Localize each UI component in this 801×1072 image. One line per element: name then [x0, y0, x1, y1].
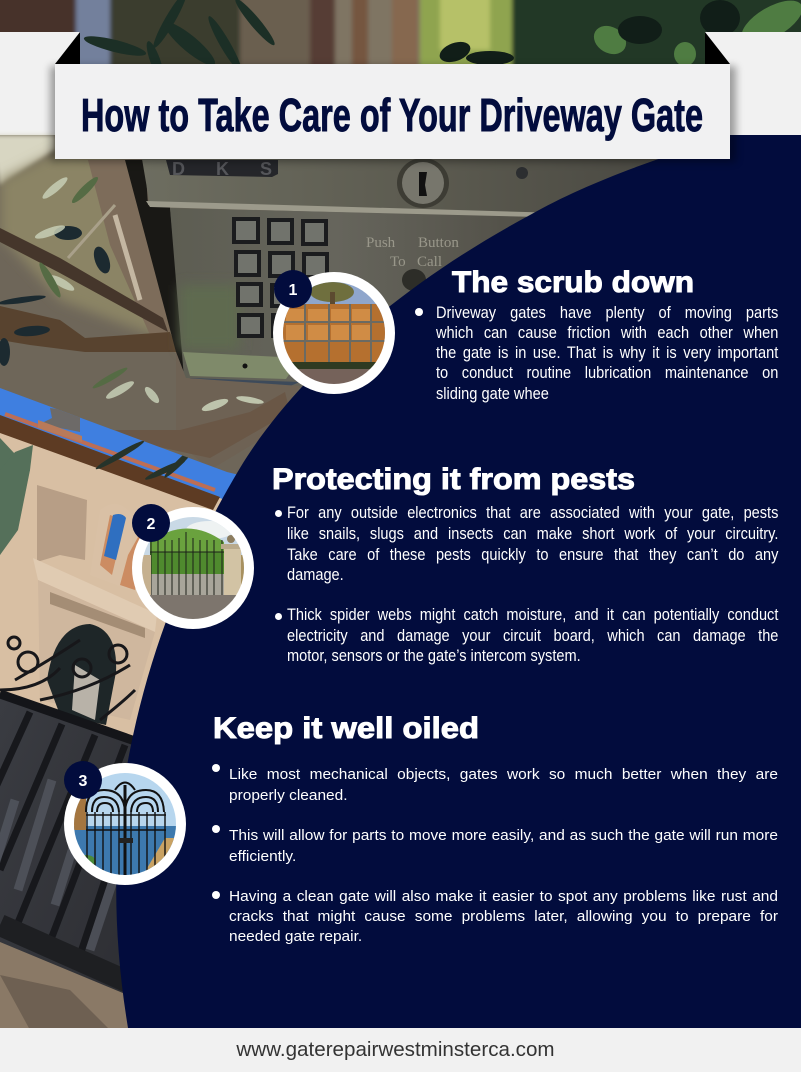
text block: the scrub down: Driveway gates have plenty of moving parts: [436, 303, 778, 322]
bullet: pests first point: [275, 510, 282, 517]
text block: oiled second point: [229, 827, 778, 865]
text block: the scrub down: the gate is in use. That is why it is very important: [436, 343, 778, 362]
text block: oiled third point: needed gate repair.: [229, 928, 362, 945]
title ribbon: [55, 64, 730, 159]
bullet: scrub down: [415, 308, 423, 316]
number badge 1: [274, 270, 312, 308]
text block: pests first point: damage.: [287, 566, 344, 584]
text block: pests first point: Take care of these pests quickly to ensure that they can’t do any: [287, 546, 778, 564]
text block: the scrub down: [436, 303, 778, 403]
photo circle 2: iron driveway gate: [132, 507, 254, 629]
photo circle 3: ornamental gate: [64, 763, 186, 885]
text block: the scrub down: to conduct routine lubrication maintenance on: [436, 363, 778, 382]
photo: olive tree and intercom: DKS: [172, 159, 272, 179]
text block: oiled second point: This will allow for parts to move more easily, and as such the gate will run more: [229, 827, 778, 844]
photo: leaves at top: [0, 0, 801, 81]
bullet: pests second point: [275, 613, 282, 620]
photo: olive tree and intercom: [0, 135, 801, 485]
title ribbon folds: [55, 32, 730, 64]
bullet: oiled first point: [212, 764, 220, 772]
text block: pests first point: like snails, slugs and insects can make short work of your circuitry.: [287, 525, 778, 543]
navy curved panel: [116, 135, 801, 1028]
text block: oiled third point: cracks that might cause some problems later, allowing you to prepare for: [229, 908, 778, 925]
bullet: oiled third point: [212, 891, 220, 899]
bullet: oiled second point: [212, 825, 220, 833]
photo: olive tree and intercom: Push: [366, 235, 396, 251]
text block: oiled first point: Like most mechanical objects, gates work so much better when they are: [229, 766, 778, 783]
photo: olive tree and intercom: To: [390, 254, 406, 270]
text block: pests first point: For any outside electronics that are associated with your gate, pests: [287, 504, 778, 522]
text block: pests second point: Thick spider webs might catch moisture, and it can potentially conduct: [287, 606, 778, 624]
photo: mansion and iron gate: [0, 388, 236, 1028]
heading: the scrub down: The scrub down: [452, 266, 694, 299]
number badge 1: 1: [289, 282, 298, 299]
text block: pests second point: motor, sensors or the gate’s intercom system.: [287, 647, 581, 665]
footer website: www.gaterepairwestminsterca.com: [236, 1038, 555, 1061]
footer website: [0, 1028, 801, 1072]
heading: protecting it from pests: Protecting it from pests: [272, 463, 635, 496]
number badge 2: 2: [147, 516, 156, 533]
text block: oiled third point: Having a clean gate will also make it easier to spot any problems like rust and: [229, 888, 778, 905]
photo: olive tree and intercom: Button: [418, 235, 459, 251]
text block: the scrub down: which can cause friction with each other when: [436, 323, 778, 342]
text block: oiled second point: efficiently.: [229, 848, 296, 865]
number badge 2: [132, 504, 170, 542]
text block: pests second point: electricity and damage your circuit board, which can damage the: [287, 627, 778, 645]
text block: pests first point: [287, 504, 778, 584]
text block: the scrub down: sliding gate whee: [436, 384, 549, 403]
text block: oiled first point: properly cleaned.: [229, 787, 348, 804]
heading: keep it well oiled: Keep it well oiled: [213, 712, 479, 745]
number badge 3: [64, 761, 102, 799]
title ribbon shadow: [50, 66, 736, 162]
text block: oiled third point: [229, 888, 778, 945]
number badge 3: 3: [79, 773, 88, 790]
photo: olive tree and intercom: Call: [417, 254, 442, 270]
text block: oiled first point: [229, 766, 778, 804]
text block: pests second point: [287, 606, 778, 665]
top grey strip: [0, 32, 801, 135]
photo circle 1: wooden gate: [273, 272, 395, 394]
